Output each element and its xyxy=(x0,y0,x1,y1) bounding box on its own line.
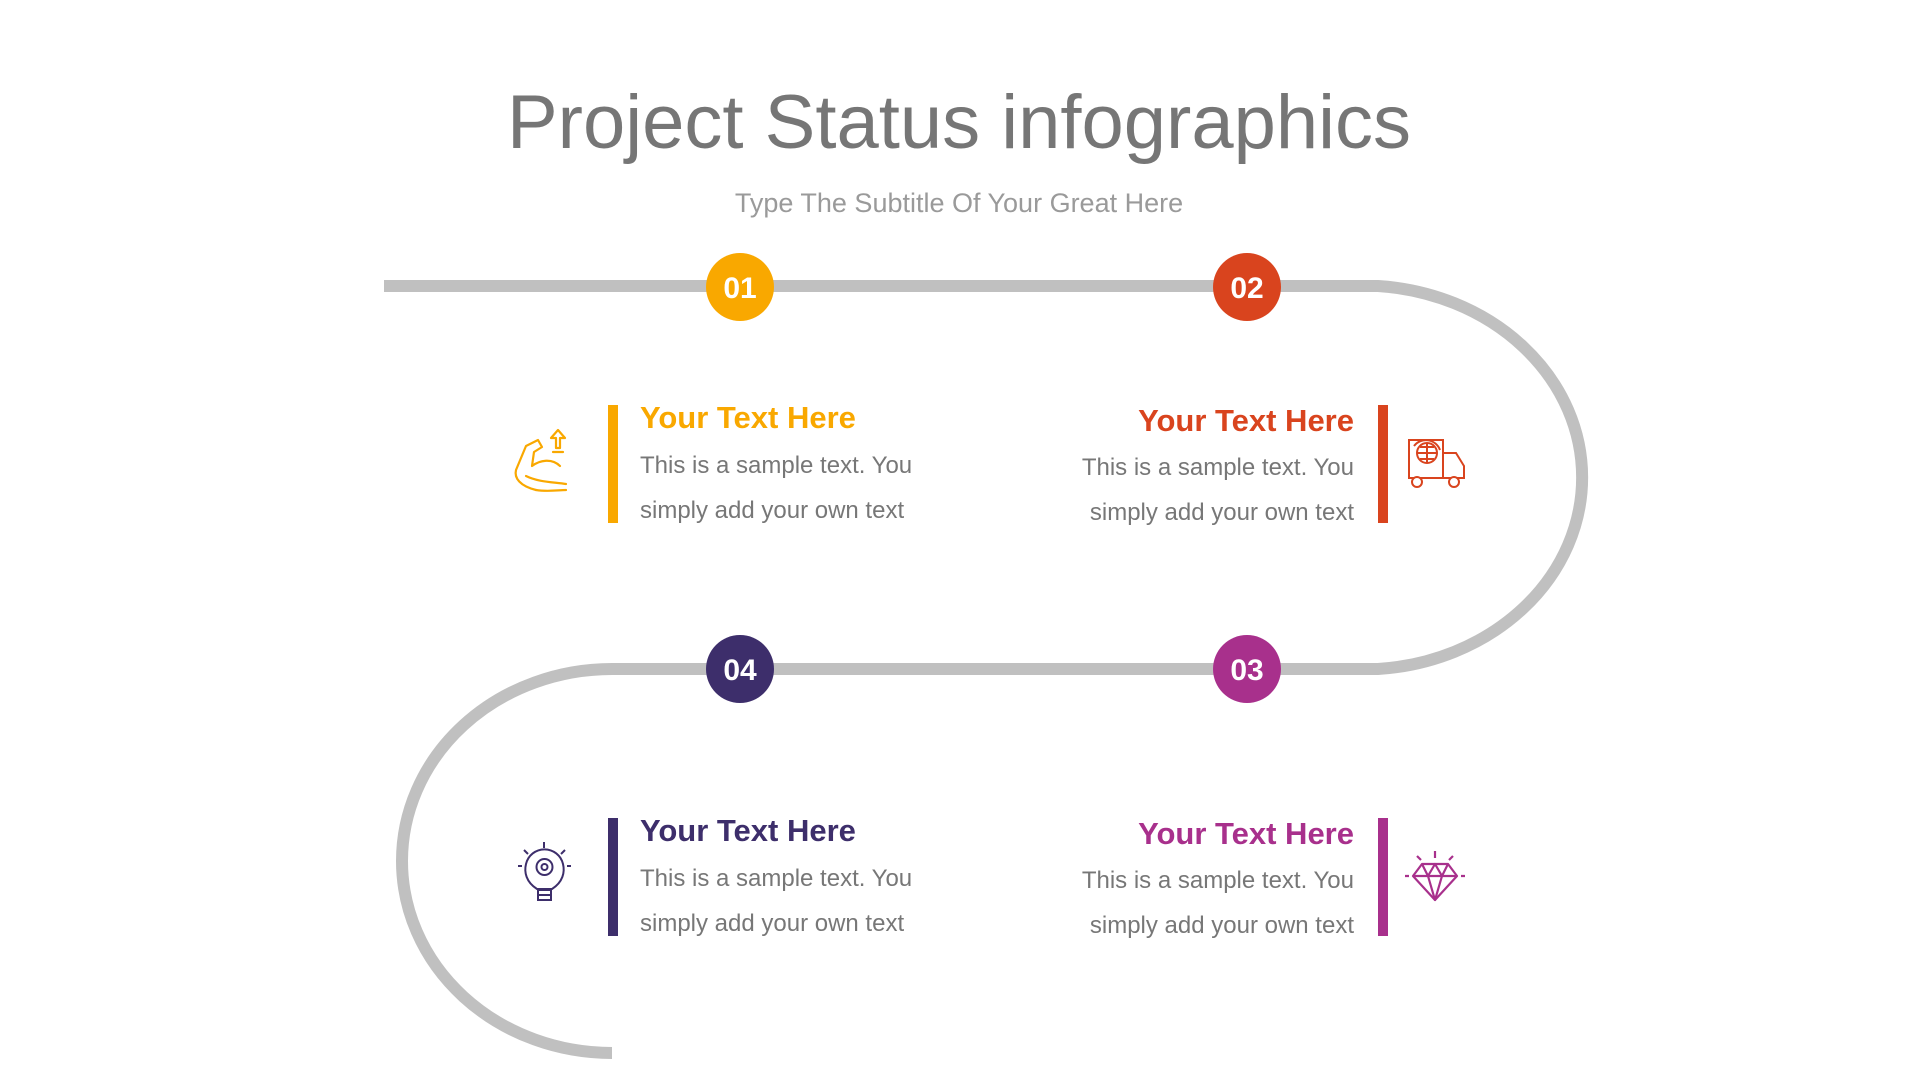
body 02: simply add your own text xyxy=(1090,499,1354,526)
marker 01: 01 xyxy=(723,272,757,305)
title: Project Status infographics xyxy=(507,80,1411,165)
marker 03: 03 xyxy=(1230,654,1264,687)
body 03: This is a sample text. You xyxy=(1082,867,1354,894)
accent bar 04 xyxy=(608,818,618,936)
marker 01 xyxy=(706,253,774,321)
marker 02 xyxy=(1213,253,1281,321)
body 04: simply add your own text xyxy=(640,910,904,937)
panel: item 03 xyxy=(1082,816,1465,939)
marker 04 xyxy=(706,635,774,703)
accent bar 03 xyxy=(1378,818,1388,936)
heading 02: Your Text Here xyxy=(1138,403,1354,438)
icon: delivery truck with globe xyxy=(1409,440,1464,487)
body 01: This is a sample text. You xyxy=(640,452,912,479)
body 01: simply add your own text xyxy=(640,497,904,524)
marker 02: 02 xyxy=(1230,272,1264,305)
heading 04: Your Text Here xyxy=(640,813,856,848)
accent bar 01 xyxy=(608,405,618,523)
body 03: simply add your own text xyxy=(1090,912,1354,939)
accent bar 02 xyxy=(1378,405,1388,523)
road path xyxy=(384,286,1582,1053)
icon: lightbulb with gear xyxy=(518,842,571,900)
body 04: This is a sample text. You xyxy=(640,865,912,892)
icon: flexed arm xyxy=(516,430,566,491)
body 02: This is a sample text. You xyxy=(1082,454,1354,481)
marker 04: 04 xyxy=(723,654,757,687)
panel: item 01 xyxy=(516,400,912,524)
panel: item 04 xyxy=(518,813,912,937)
heading 01: Your Text Here xyxy=(640,400,856,435)
marker 03 xyxy=(1213,635,1281,703)
subtitle: Type The Subtitle Of Your Great Here xyxy=(735,188,1183,218)
panel: item 02 xyxy=(1082,403,1464,526)
heading 03: Your Text Here xyxy=(1138,816,1354,851)
icon: diamond xyxy=(1405,851,1465,900)
